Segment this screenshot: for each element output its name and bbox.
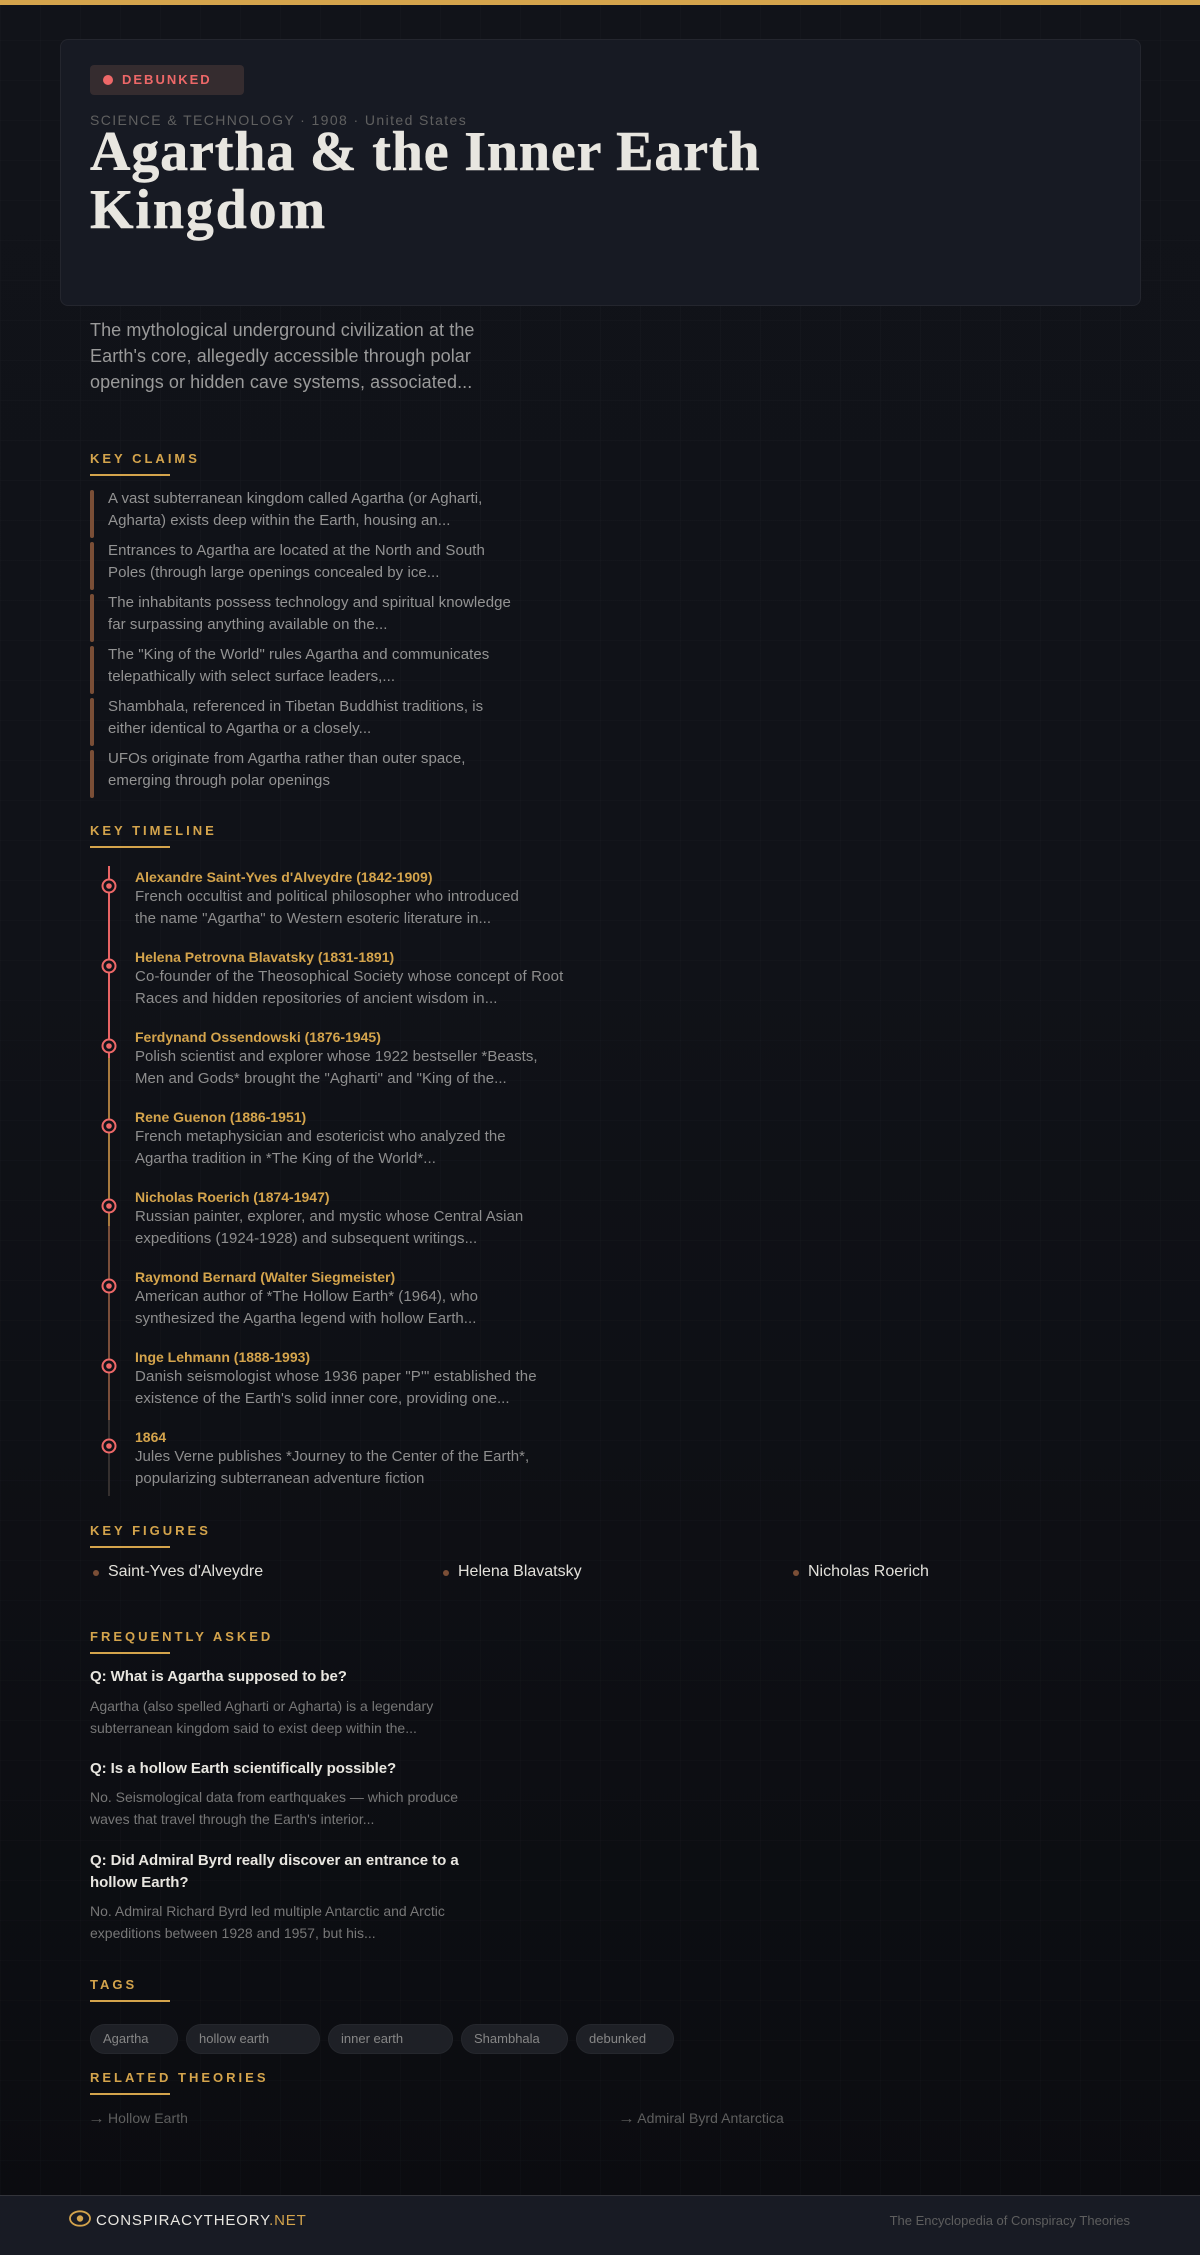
- panel: hero card: [60, 39, 1141, 306]
- footer: [0, 2195, 1200, 2255]
- timeline entry: Bernard: Raymond Bernard (Walter Siegmeister): [135, 1269, 395, 1285]
- related link: Hollow Earth: Hollow Earth: [108, 2110, 188, 2126]
- claim 2: Entrances to Agartha are located at the North and South: [108, 542, 485, 559]
- timeline entry: 1864: [135, 1429, 529, 1487]
- FAQ question 1: Q: What is Agartha supposed to be?: [90, 1668, 347, 1685]
- tag: debunked: debunked: [589, 2031, 646, 2046]
- heading: key timeline: KEY TIMELINE: [90, 823, 217, 838]
- top accent bar: [0, 0, 1200, 5]
- tag: inner earth: inner earth: [341, 2031, 403, 2046]
- FAQ answer 3: [90, 1903, 445, 1941]
- timeline entry: Ossendowski: Ferdynand Ossendowski (1876-1945): [135, 1029, 381, 1045]
- FAQ answer 1: subterranean kingdom said to exist deep within the...: [90, 1720, 417, 1736]
- figure: Saint-Yves: Saint-Yves d'Alveydre: [108, 1563, 263, 1580]
- claim 3: far surpassing anything available on the...: [108, 616, 387, 633]
- timeline entry: Lehmann: Danish seismologist whose 1936 paper "P'" established the: [135, 1368, 537, 1385]
- timeline entry: Guenon: Agartha tradition in *The King of the World*...: [135, 1150, 436, 1167]
- tag: hollow earth: hollow earth: [199, 2031, 269, 2046]
- tag: Shambhala: Shambhala: [474, 2031, 540, 2046]
- FAQ answer 1: [90, 1698, 434, 1736]
- claim 6: UFOs originate from Agartha rather than outer space,: [108, 750, 465, 767]
- claim 6: emerging through polar openings: [108, 772, 330, 789]
- timeline entry: 1864: popularizing subterranean adventure fiction: [135, 1470, 424, 1487]
- claim 4: [90, 646, 489, 694]
- timeline entry: Blavatsky: Races and hidden repositories of ancient wisdom in...: [135, 990, 498, 1007]
- timeline entry: Roerich: Russian painter, explorer, and mystic whose Central Asian: [135, 1208, 523, 1225]
- badge label: DEBUNKED: [122, 72, 212, 87]
- tag: inner earth: [328, 2024, 453, 2054]
- claim 6: [90, 750, 465, 798]
- brand name: CONSPIRACYTHEORY.NET: [96, 2212, 307, 2229]
- claim 1: [90, 490, 482, 538]
- timeline entry: Guenon: Rene Guenon (1886-1951): [135, 1109, 306, 1125]
- timeline entry: Lehmann: existence of the Earth's solid inner core, providing one...: [135, 1390, 510, 1407]
- timeline entry: Bernard: synthesized the Agartha legend with hollow Earth...: [135, 1310, 476, 1327]
- claim 4: The "King of the World" rules Agartha and communicates: [108, 646, 489, 663]
- claim 2: [90, 542, 485, 590]
- timeline entry: Lehmann: [135, 1349, 537, 1407]
- description: openings or hidden cave systems, associated...: [90, 372, 472, 392]
- timeline entry: Blavatsky: Helena Petrovna Blavatsky (1831-1891): [135, 949, 394, 965]
- timeline entry: Saint-Yves: the name "Agartha" to Western esoteric literature in...: [135, 910, 491, 927]
- timeline entry: Blavatsky: Co-founder of the Theosophical Society whose concept of Root: [135, 968, 563, 985]
- timeline entry: Saint-Yves: French occultist and political philosopher who introduced: [135, 888, 519, 905]
- FAQ answer 2: No. Seismological data from earthquakes — which produce: [90, 1789, 458, 1805]
- figure: Blavatsky: Helena Blavatsky: [458, 1563, 582, 1580]
- timeline entry: Bernard: [135, 1269, 478, 1327]
- claim 1: Agharta) exists deep within the Earth, housing an...: [108, 512, 450, 529]
- timeline entry: Roerich: [135, 1189, 523, 1247]
- tag: Shambhala: [461, 2024, 568, 2054]
- FAQ question 3: hollow Earth?: [90, 1874, 189, 1891]
- claim 5: [90, 698, 483, 746]
- badge dot: [103, 75, 113, 85]
- FAQ answer 1: Agartha (also spelled Agharti or Agharta) is a legendary: [90, 1698, 433, 1714]
- timeline entry: Roerich: Nicholas Roerich (1874-1947): [135, 1189, 330, 1205]
- status badge: debunked: [90, 65, 244, 95]
- claim 4: telepathically with select surface leaders,...: [108, 668, 395, 685]
- heading: key figures: KEY FIGURES: [90, 1523, 211, 1538]
- tag: Agartha: [90, 2024, 178, 2054]
- timeline entry: 1864: Jules Verne publishes *Journey to the Center of the Earth*,: [135, 1448, 529, 1465]
- FAQ answer 3: expeditions between 1928 and 1957, but his...: [90, 1925, 376, 1941]
- claim 5: Shambhala, referenced in Tibetan Buddhist traditions, is: [108, 698, 483, 715]
- timeline line and nodes: [102, 866, 116, 1496]
- claim 3: [90, 594, 511, 642]
- description: Earth's core, allegedly accessible through polar: [90, 346, 471, 366]
- tag: Agartha: Agartha: [103, 2031, 149, 2046]
- timeline entry: Guenon: French metaphysician and esotericist who analyzed the: [135, 1128, 506, 1145]
- heading: key claims: KEY CLAIMS: [90, 451, 200, 466]
- timeline entry: Ossendowski: Men and Gods* brought the "Agharti" and "King of the...: [135, 1070, 507, 1087]
- title: [90, 121, 760, 241]
- footer tagline: The Encyclopedia of Conspiracy Theories: [890, 2213, 1130, 2228]
- timeline entry: Saint-Yves: Alexandre Saint-Yves d'Alveydre (1842-1909): [135, 869, 432, 885]
- figure: Roerich: Nicholas Roerich: [808, 1563, 929, 1580]
- FAQ question 3: Q: Did Admiral Byrd really discover an entrance to a: [90, 1852, 459, 1869]
- meta line: SCIENCE & TECHNOLOGY · 1908 · United States: [90, 112, 467, 128]
- timeline entry: Ossendowski: Polish scientist and explorer whose 1922 bestseller *Beasts,: [135, 1048, 538, 1065]
- timeline entry: 1864: 1864: [135, 1429, 166, 1445]
- tag: hollow earth: [186, 2024, 320, 2054]
- claim 1: A vast subterranean kingdom called Agartha (or Agharti,: [108, 490, 482, 507]
- tag: debunked: [576, 2024, 674, 2054]
- heading: related theories: RELATED THEORIES: [90, 2070, 268, 2085]
- timeline entry: Roerich: expeditions (1924-1928) and subsequent writings...: [135, 1230, 477, 1247]
- FAQ answer 2: waves that travel through the Earth's interior...: [90, 1811, 374, 1827]
- timeline entry: Lehmann: Inge Lehmann (1888-1993): [135, 1349, 310, 1365]
- FAQ answer 3: No. Admiral Richard Byrd led multiple Antarctic and Arctic: [90, 1903, 445, 1919]
- claim 5: either identical to Agartha or a closely...: [108, 720, 371, 737]
- heading: frequently asked: FREQUENTLY ASKED: [90, 1629, 273, 1644]
- heading: tags: TAGS: [90, 1977, 137, 1992]
- title: Kingdom: [90, 179, 327, 241]
- related link: Admiral Byrd Antarctica: →: [618, 2110, 635, 2126]
- title: Agartha & the Inner Earth: [90, 121, 760, 183]
- related link: Admiral Byrd Antarctica: Admiral Byrd Antarctica: [637, 2110, 784, 2126]
- timeline entry: Saint-Yves: [135, 869, 519, 927]
- timeline entry: Ossendowski: [135, 1029, 538, 1087]
- icon: eye logo: [69, 2210, 91, 2227]
- timeline entry: Guenon: [135, 1109, 506, 1167]
- FAQ answer 2: [90, 1789, 458, 1827]
- timeline entry: Bernard: American author of *The Hollow Earth* (1964), who: [135, 1288, 478, 1305]
- FAQ question 2: Q: Is a hollow Earth scientifically possible?: [90, 1760, 396, 1777]
- FAQ question 3: [90, 1852, 459, 1891]
- description: [90, 320, 475, 392]
- related link: Hollow Earth: →: [88, 2110, 105, 2126]
- claim 2: Poles (through large openings concealed by ice...: [108, 564, 439, 581]
- description: The mythological underground civilization at the: [90, 320, 475, 340]
- timeline entry: Blavatsky: [135, 949, 564, 1007]
- claim 3: The inhabitants possess technology and spiritual knowledge: [108, 594, 511, 611]
